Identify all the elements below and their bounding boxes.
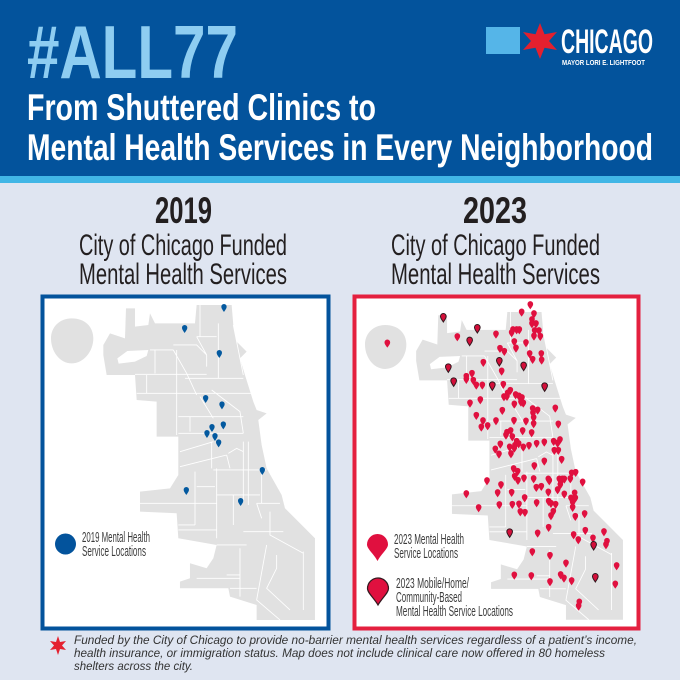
- footnote text: [74, 635, 637, 673]
- hashtag title: #ALL77: [27, 10, 238, 94]
- footnote star icon: [50, 636, 66, 655]
- map base: 2023: [365, 312, 623, 620]
- map pins: 2023 southern locations: [463, 462, 619, 611]
- logo: City of Chicago: MAYOR LORI E. LIGHTFOOT: [562, 58, 645, 67]
- legend: 2023 locations: Service Locations: [394, 546, 458, 562]
- legend: 2023 mobile and community locations: Mental Health Service Locations: [396, 604, 513, 620]
- logo star: [523, 23, 557, 59]
- map pins: 2023 northern locations: [384, 301, 564, 466]
- panel: 2023 map: [354, 296, 638, 628]
- legend: 2023 mobile and community locations: 2023 Mobile/Home/: [396, 576, 470, 592]
- heading: 2019: City of Chicago Funded: [79, 229, 287, 262]
- legend: 2019 locations: Service Locations: [82, 544, 146, 560]
- header banner: [0, 0, 680, 183]
- legend: 2023 locations: [367, 532, 464, 562]
- headline: From Shuttered Clinics to: [27, 87, 376, 128]
- panel: 2019 map: [42, 296, 328, 628]
- heading: 2023: 2023: [463, 190, 527, 231]
- legend: 2023 mobile and community locations: [368, 576, 513, 620]
- legend: 2019 locations: 2019 Mental Health: [82, 530, 150, 546]
- logo: City of Chicago: [486, 23, 653, 67]
- headline: [27, 87, 653, 168]
- footnote text: health insurance, or immigration status. Map does not include clinical care now offered in 80 homeless: [74, 648, 605, 660]
- legend: 2023 mobile and community locations: Community-Based: [396, 590, 462, 606]
- map: 2019 service locations: [51, 304, 315, 620]
- heading: 2019: Mental Health Services: [79, 258, 287, 291]
- heading: 2019: [79, 190, 287, 291]
- heading: 2019: 2019: [155, 190, 212, 231]
- footnote text: Funded by the City of Chicago to provide no-barrier mental health services regardless of a patient’s income,: [74, 635, 637, 647]
- legend: 2023 locations: 2023 Mental Health: [394, 532, 464, 548]
- footnote text: shelters across the city.: [74, 661, 193, 673]
- legend: 2019 locations: [55, 530, 150, 560]
- heading: 2023: [391, 190, 600, 291]
